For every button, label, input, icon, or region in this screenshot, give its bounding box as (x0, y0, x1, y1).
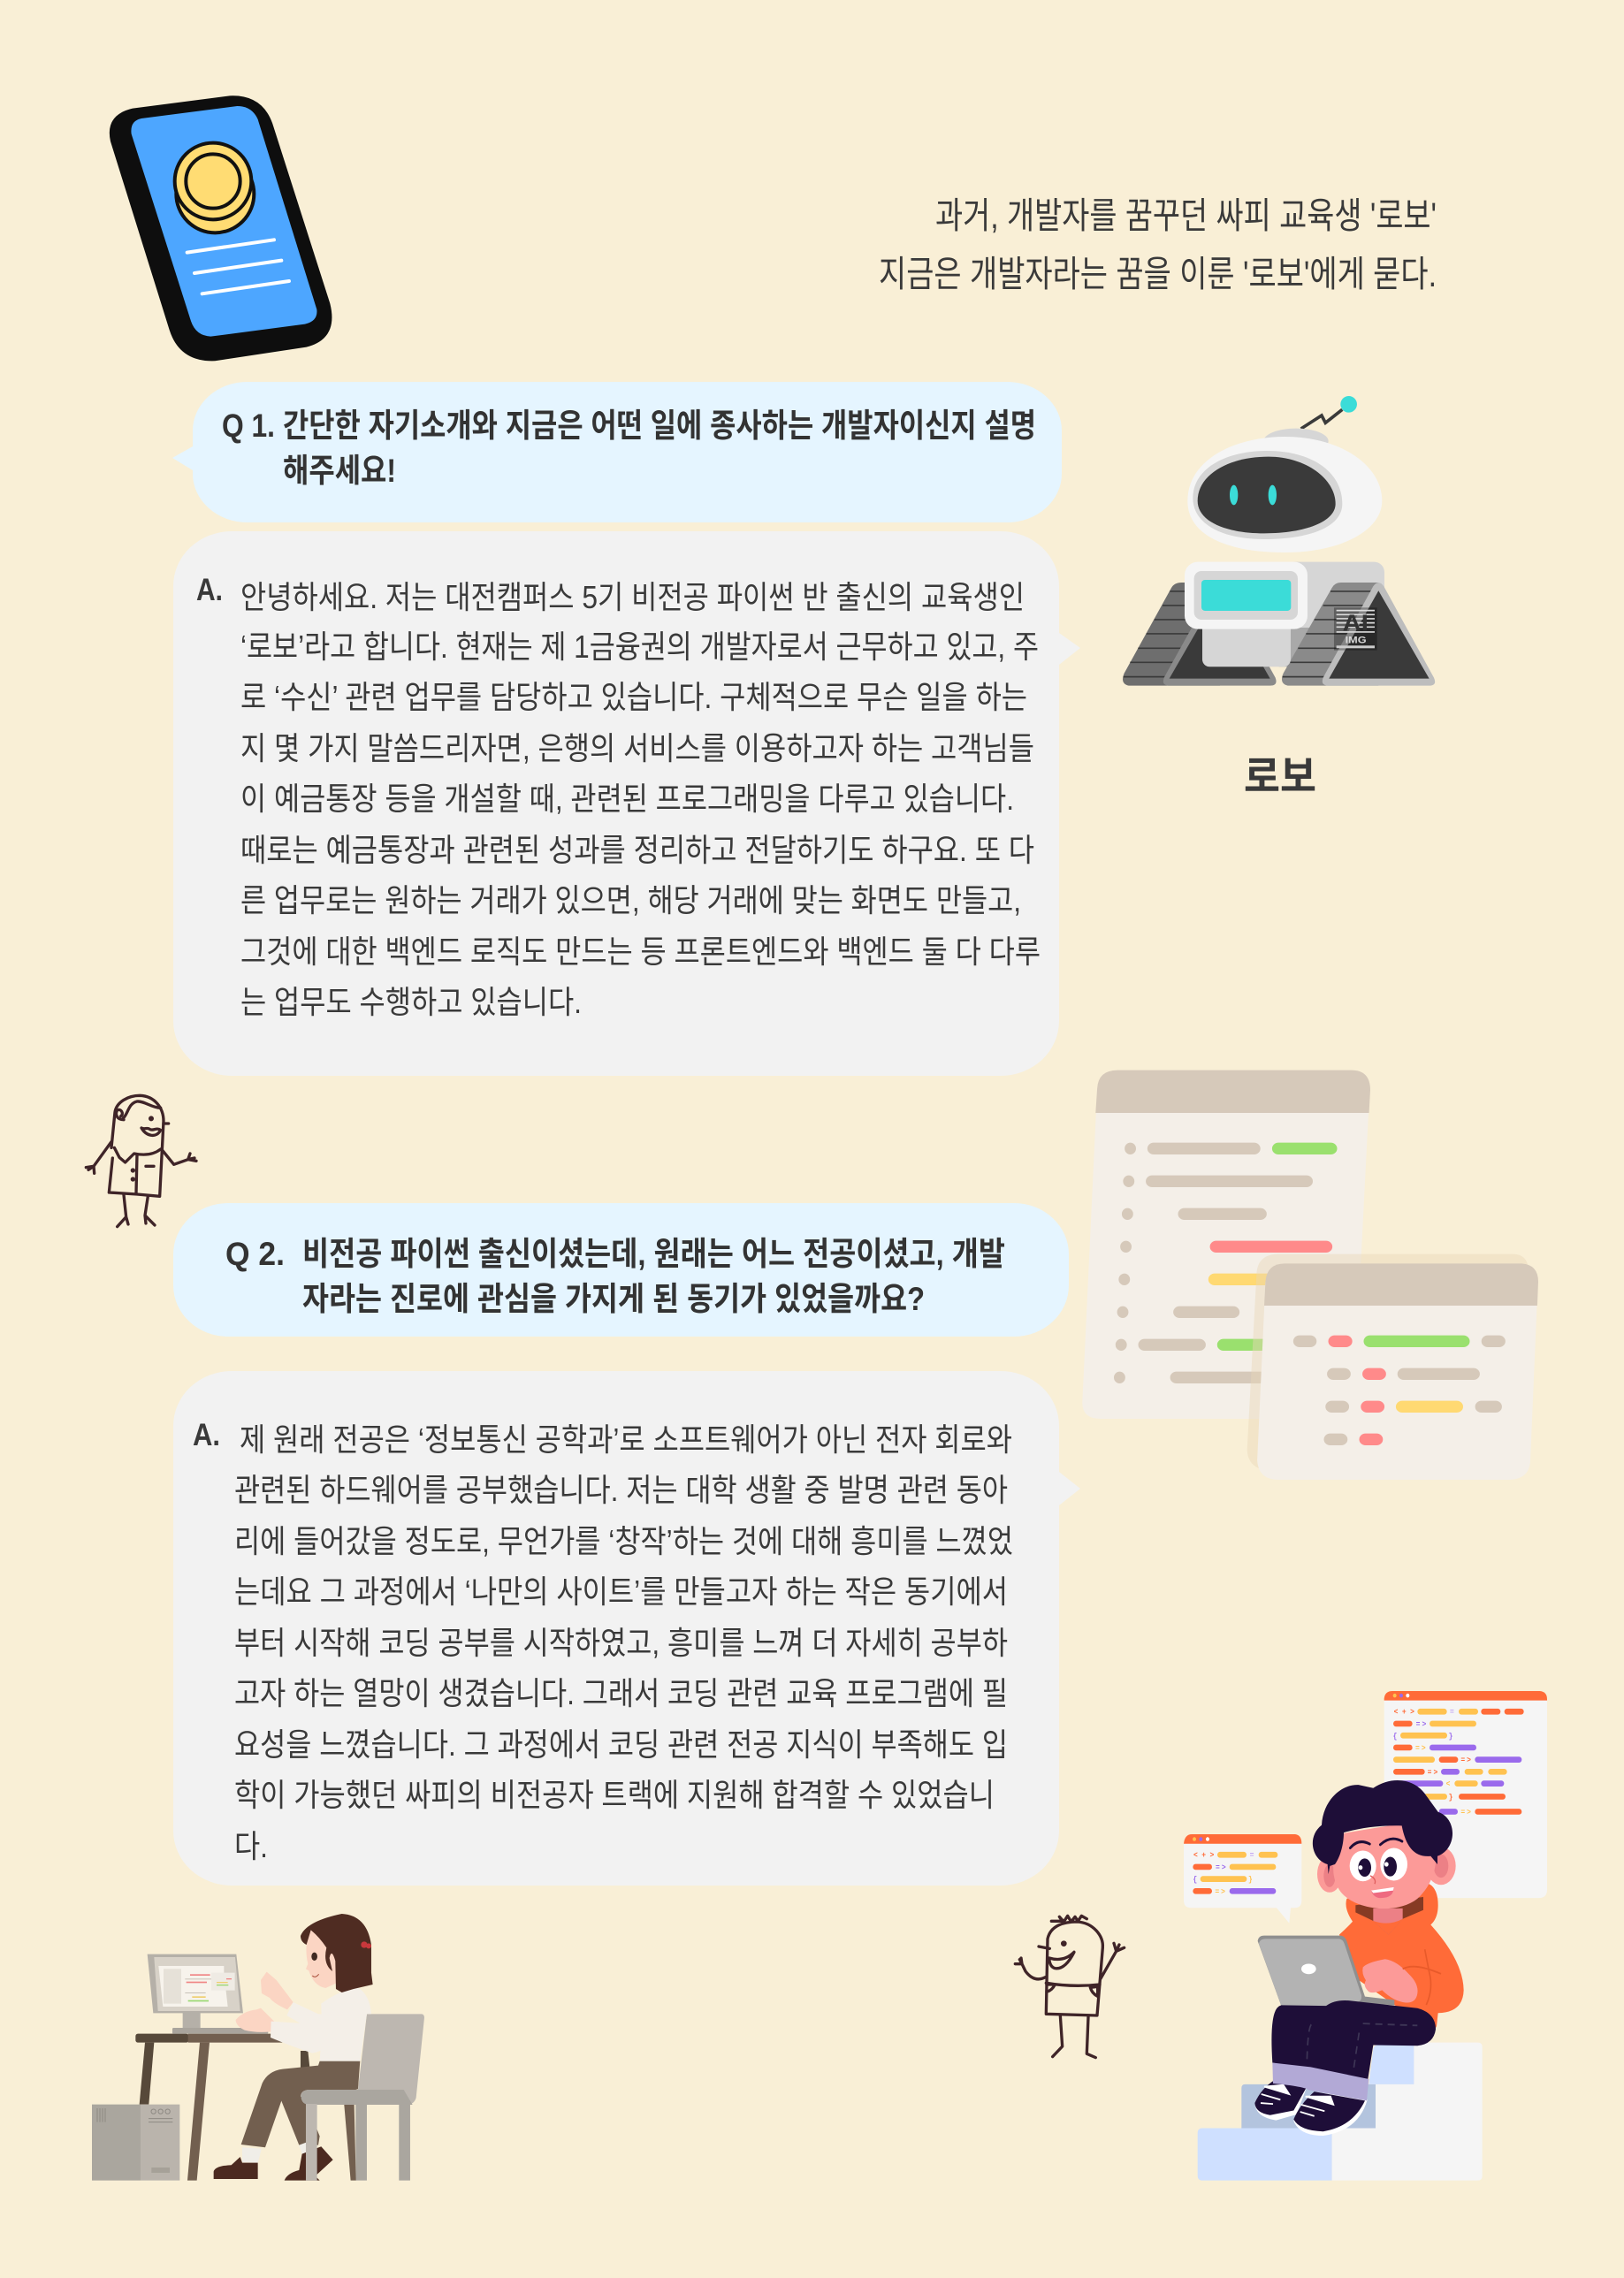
panel: question 1: 해주세요! (283, 453, 396, 489)
code window large (1384, 1691, 1547, 1898)
panel: answer 2: 고자 하는 열망이 생겼습니다. 그래서 코딩 관련 교육 프로그램에 필 (234, 1675, 1008, 1711)
icon: robot: IMG (1346, 635, 1367, 645)
code window small: => (1215, 1887, 1225, 1896)
panel: answer 1: A. (196, 573, 223, 607)
panel: answer 2: 다. (234, 1828, 268, 1864)
panel: answer 2: 관련된 하드웨어를 공부했습니다. 저는 대학 생활 중 발명 관련 동아 (234, 1472, 1008, 1508)
panel: answer 2: A. (193, 1418, 220, 1452)
panel: answer 2: 요성을 느꼈습니다. 그 과정에서 코딩 관련 전공 지식이 부족해도 입 (234, 1726, 1008, 1763)
panel: answer 1: 른 업무로는 원하는 거래가 있으면, 해당 거래에 맞는 화면도 만들고, (240, 882, 1021, 918)
panel: answer 1: 는 업무도 수행하고 있습니다. (240, 984, 582, 1020)
panel: question 2: 자라는 진로에 관심을 가지게 된 동기가 있었을까요? (302, 1281, 925, 1317)
panel: answer 1: 지 몇 가지 말씀드리자면, 은행의 서비스를 이용하고자 하는 고객님들 (240, 730, 1034, 766)
code window small: { (1193, 1875, 1197, 1885)
panel: question 1: 간단한 자기소개와 지금은 어떤 일에 종사하는 개발자이신지 설명 (283, 408, 1036, 444)
panel: answer 2 (173, 1371, 1080, 1886)
panel: question 2 (173, 1203, 1069, 1337)
code window small: = (1250, 1851, 1254, 1860)
icon: phone with coins (110, 95, 332, 361)
icon: doodle man with moustache (86, 1095, 196, 1227)
panel: answer 2: 제 원래 전공은 ‘정보통신 공학과’로 소프트웨어가 아닌 전자 회로와 (240, 1421, 1012, 1458)
panel: answer 1: ‘로보’라고 합니다. 현재는 제 1금융권의 개발자로서 근무하고 있고, 주 (240, 629, 1039, 665)
panel: answer 2: 부터 시작해 코딩 공부를 시작하였고, 흥미를 느껴 더 자세히 공부하 (234, 1625, 1008, 1661)
code window large: => (1415, 1744, 1426, 1753)
panel: answer 1: 이 예금통장 등을 개설할 때, 관련된 프로그래밍을 다루고 있습니다. (240, 781, 1014, 817)
code window large: <+> (1394, 1708, 1414, 1717)
code window large: } (1449, 1732, 1452, 1741)
illustration: boy with laptop on stairs (1184, 1691, 1547, 2181)
panel: question 2: Q 2. (225, 1236, 285, 1272)
panel: answer 1: 때로는 예금통장과 관련된 성과를 정리하고 전달하기도 하구요. 또 다 (240, 832, 1034, 868)
code window small: } (1248, 1875, 1253, 1885)
code window large: = (1450, 1708, 1454, 1717)
boy figure (1254, 1780, 1464, 2136)
code window large: => (1416, 1720, 1426, 1729)
code window small: => (1216, 1863, 1226, 1872)
stairs (1198, 2043, 1483, 2181)
chart: code windows illustration (1082, 1070, 1538, 1480)
icon: doodle man waving (1015, 1916, 1125, 2058)
illustration: woman at computer (92, 1914, 424, 2181)
intro text: 과거, 개발자를 꿈꾸던 싸피 교육생 '로보' (935, 195, 1437, 236)
panel: answer 2: 리에 들어갔을 정도로, 무언가를 ‘창작’하는 것에 대해 흥미를 느꼈었 (234, 1523, 1013, 1559)
intro text: 지금은 개발자라는 꿈을 이룬 '로보'에게 묻다. (879, 254, 1437, 294)
panel: question 2: 비전공 파이썬 출신이셨는데, 원래는 어느 전공이셨고, 개발 (302, 1236, 1005, 1272)
code window large: => (1428, 1768, 1437, 1777)
code window large: => (1460, 1756, 1471, 1765)
panel: answer 1 (173, 531, 1080, 1076)
icon: robot (1123, 396, 1435, 686)
panel: answer 2: 학이 가능했던 싸피의 비전공자 트랙에 지원해 합격할 수 있었습니 (234, 1777, 995, 1813)
panel: answer 1: 로 ‘수신’ 관련 업무를 담당하고 있습니다. 구체적으로 무슨 일을 하는 (240, 679, 1027, 715)
code window large: < (1446, 1779, 1450, 1789)
panel: answer 2: 는데요 그 과정에서 ‘나만의 사이트’를 만들고자 하는 작은 동기에서 (234, 1573, 1008, 1610)
icon: robot: AI (1343, 609, 1369, 636)
code window small: <+> (1193, 1851, 1214, 1860)
panel: answer 1: 안녕하세요. 저는 대전캠퍼스 5기 비전공 파이썬 반 출신의 교육생인 (240, 579, 1025, 615)
code window large: } (1449, 1793, 1452, 1802)
panel: question 1 (172, 382, 1062, 522)
code window large: { (1393, 1732, 1397, 1741)
panel: answer 1: 그것에 대한 백엔드 로직도 만드는 등 프론트엔드와 백엔드 둘 다 다루 (240, 933, 1041, 970)
panel: question 1: Q 1. (222, 408, 275, 444)
robot name: 로보 (1244, 754, 1316, 801)
code window small (1184, 1834, 1301, 1924)
intro text (879, 195, 1437, 294)
code window large: => (1460, 1808, 1471, 1817)
